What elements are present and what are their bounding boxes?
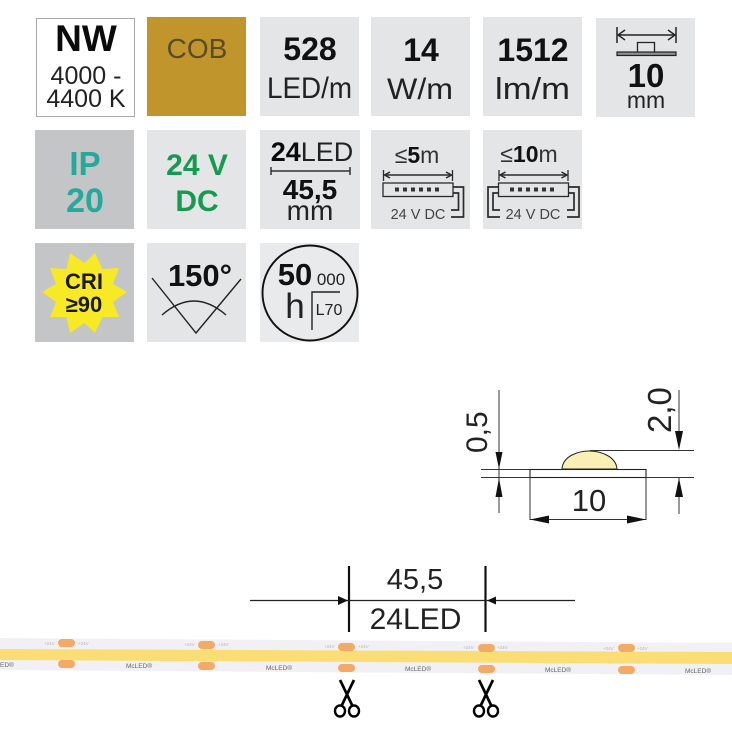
tile: colour temperature NW: NW [55, 18, 117, 59]
tile: 50 000 h lifetime: 000 [317, 270, 345, 289]
LED strip photo: McLED® [545, 666, 571, 674]
tile: 50 000 h lifetime: h [285, 287, 305, 326]
diagram: 45,5 mm cutting distance: 24LED [370, 603, 461, 636]
tile: 24 V DC: DC [175, 185, 219, 218]
tile: IP 20: IP [69, 145, 101, 182]
tile: width 10 mm [596, 18, 695, 117]
LED strip photo [0, 638, 732, 675]
tile: 24 V DC: 24 V [166, 149, 228, 182]
tile: colour temperature NW: 4000 - [51, 62, 121, 90]
tile: 24 V DC [147, 130, 246, 229]
tile: 24 LED / 45,5 mm: mm [287, 195, 333, 226]
tile: 50 000 h lifetime: 50 [278, 257, 312, 292]
tile: 528 LED/m: 528 [283, 31, 337, 67]
tile: IP 20 [35, 130, 134, 229]
tile: max 5 m single feed [371, 130, 470, 229]
diagram: 45,5 mm cutting distance: 45,5 [387, 564, 443, 596]
tile: max 10 m double feed: ≤10m [500, 141, 558, 167]
icon: scissors left [335, 680, 359, 716]
tile: IP 20: 20 [66, 182, 104, 220]
tile: colour temperature NW: 4400 K [46, 85, 126, 113]
tile: width 10 mm: mm [627, 87, 665, 113]
LED strip photo: McLED® [405, 665, 431, 673]
strip labels: +24V [324, 644, 335, 649]
strip labels: +24V [44, 641, 55, 646]
tile: 24 LED / 45,5 mm: 45,5 [283, 174, 337, 205]
tile: 50 000 h lifetime: L70 [316, 302, 342, 319]
icon: width arrow and strip profile [617, 27, 676, 56]
diagram: 45,5 mm cutting distance [250, 564, 575, 636]
tile: 1512 lm/m: 1512 [497, 32, 569, 68]
tile: 150 degree beam angle: 150° [168, 258, 232, 293]
strip labels: +24V [218, 642, 229, 647]
strip labels [44, 641, 648, 651]
tile: 150 degree beam angle [147, 243, 246, 342]
tile: max 10 m double feed: 24 V DC [506, 207, 560, 223]
tile: CRI 90: CRI [65, 269, 103, 294]
icon: single feed wiring [383, 170, 464, 217]
LED strip photo: McLED® [266, 664, 292, 672]
tile: colour temperature NW [36, 18, 134, 116]
solder pads [58, 639, 635, 674]
tile: 24 LED / 45,5 mm: 24LED [271, 137, 353, 167]
tile: max 10 m double feed [483, 130, 582, 229]
strip labels: +24V [497, 645, 508, 650]
LED strip photo: McLED® [685, 667, 711, 675]
dimension: 10: 10 [572, 483, 606, 518]
LED strip photo: McLED® [126, 662, 152, 670]
tile: 50 000 h lifetime [260, 243, 359, 342]
icon: double feed wiring [488, 170, 579, 217]
strip labels: +24V [603, 646, 614, 651]
tile: 14 W/m: 14 [403, 32, 439, 68]
tile: width 10 mm: 10 [628, 57, 664, 94]
strip labels: +24V [637, 646, 648, 651]
tile: CRI 90: ≥90 [66, 292, 102, 317]
tile: 528 LED/m [260, 17, 359, 116]
tile: COB [147, 17, 246, 116]
icon: beam angle lines [152, 278, 241, 333]
tile: CRI 90 [35, 243, 134, 342]
tile: max 5 m single feed: 24 V DC [391, 207, 445, 223]
icon: scissors right [474, 680, 498, 716]
LED dome [562, 451, 617, 469]
dimension: 0,5: 0,5 [461, 411, 494, 453]
strip labels: +24V [184, 642, 195, 647]
strip base [530, 470, 646, 478]
icon: yellow star badge [42, 253, 127, 333]
tile: COB: COB [167, 33, 227, 64]
tile: 1512 lm/m: lm/m [495, 71, 570, 106]
dimension: 2,0: 2,0 [641, 387, 678, 433]
tile: 24 LED / 45,5 mm [260, 130, 360, 229]
LED strip photo: ED® [0, 661, 14, 669]
strip labels: +24V [78, 641, 89, 646]
strip labels: +24V [358, 644, 369, 649]
tile: max 5 m single feed: ≤5m [395, 142, 439, 168]
tile: 14 W/m [371, 17, 470, 116]
diagram: strip cross-section [461, 387, 694, 524]
tile: 528 LED/m: LED/m [267, 72, 352, 105]
tile: 1512 lm/m [483, 17, 582, 116]
strip labels: +24V [463, 645, 474, 650]
tile: 14 W/m: W/m [387, 73, 453, 106]
